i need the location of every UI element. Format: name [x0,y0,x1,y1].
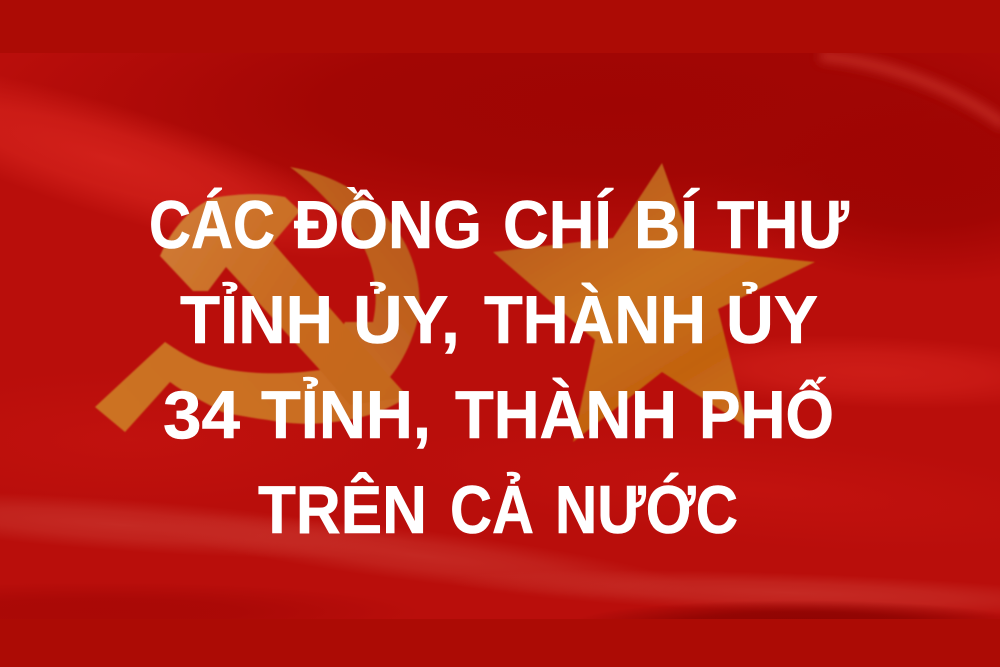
title line 3: 34 [163,377,240,453]
title line 3 [163,376,834,453]
title line 4 [258,471,738,548]
title line 1: CHÍ [503,187,614,263]
icon: hammer and sickle [95,167,419,432]
title line 1: THƯ [717,187,850,263]
title line 4: CẢ [450,471,534,548]
title line 1: ĐỒNG [294,186,482,263]
title line 3: TỈNH, [261,376,431,453]
title line 1: BÍ [634,187,700,263]
icon: sickle [95,167,419,432]
title line 3: THÀNH [455,377,677,453]
title line 2: THÀNH [484,282,706,358]
title line 2: ỦY [726,281,818,358]
title line 1: CÁC [149,187,275,263]
title line 3: PHỐ [699,376,834,453]
title line 4: NƯỚC [555,472,738,548]
title [149,186,850,548]
title line 4: TRÊN [258,471,427,548]
title line 2: ỦY, [353,281,460,358]
title line 1 [149,186,850,263]
icon: star [493,163,815,442]
icon: hammer [160,194,408,405]
title line 2 [180,281,818,358]
title line 2: TỈNH [180,281,333,358]
